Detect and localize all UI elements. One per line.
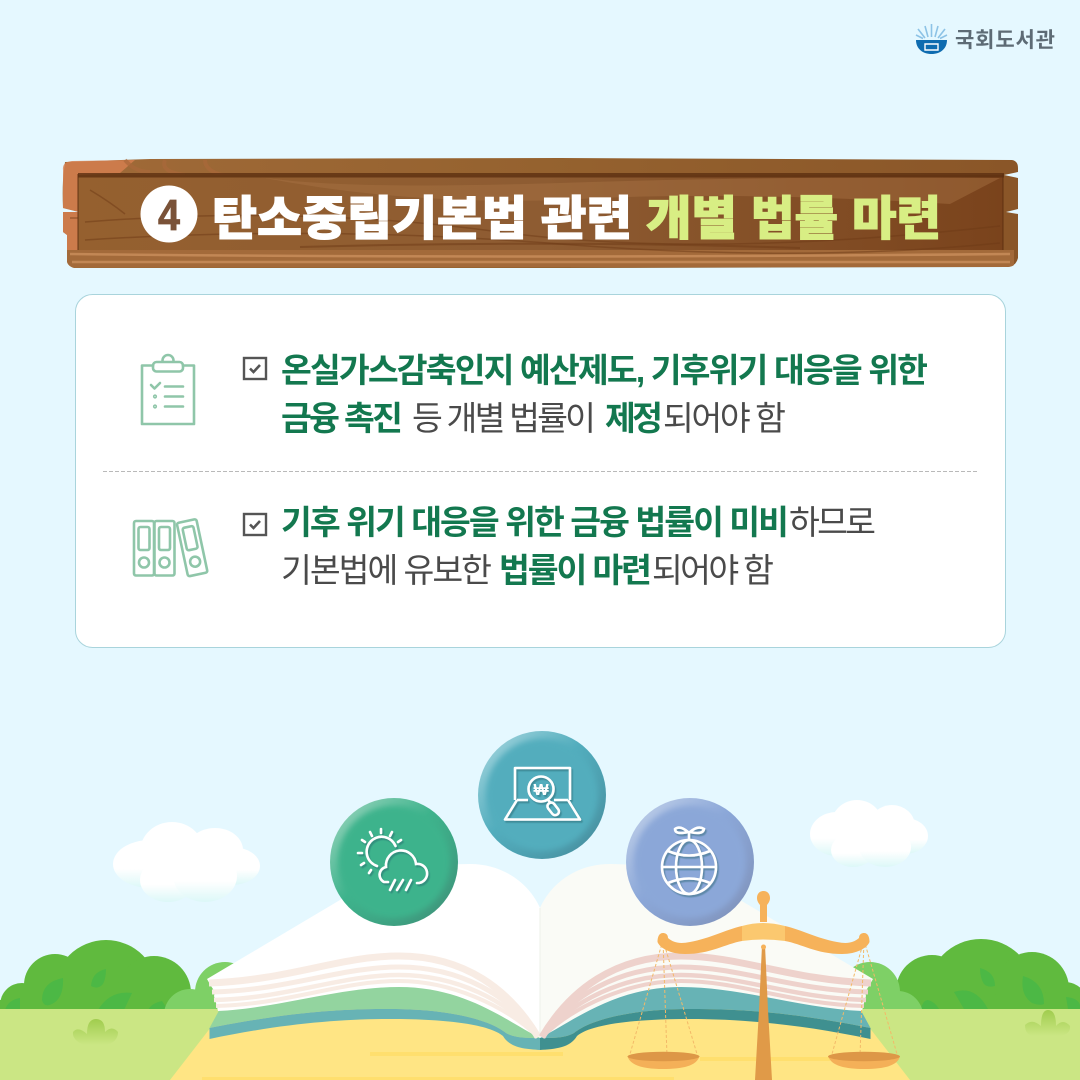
icon: binders	[134, 519, 208, 576]
title text: 탄소중립기본법	[212, 192, 527, 245]
grass tuft left	[73, 1019, 118, 1045]
icon: clipboard checklist	[142, 355, 194, 424]
logo wordmark: 국회도서관	[955, 29, 1055, 52]
item 1 text	[244, 353, 928, 438]
number badge 4	[140, 186, 198, 242]
right page	[540, 864, 873, 1050]
icon circle: laptop search: ₩	[533, 782, 549, 799]
number badge 4: 4	[158, 191, 180, 240]
cloud left	[113, 822, 260, 902]
title text: 관련	[541, 192, 632, 245]
scale pole	[755, 945, 772, 1080]
icon circle: laptop search	[478, 731, 606, 859]
scale beam	[658, 923, 870, 954]
title text: 마련	[852, 192, 941, 245]
item 2 text: 되어야 함	[652, 553, 774, 590]
scale strings	[630, 940, 897, 1056]
bushes left	[0, 940, 255, 1044]
ground	[0, 1009, 1080, 1080]
icon circle: globe sprout	[626, 798, 754, 926]
title text: 법률	[751, 192, 838, 245]
item 1 text: 온실가스감축인지 예산제도, 기후위기 대응을 위한	[281, 353, 928, 390]
checkbox	[244, 514, 266, 535]
item 1 text: 금융 촉진	[281, 401, 403, 438]
title text	[212, 192, 941, 245]
left page	[207, 864, 540, 1050]
open book	[207, 864, 873, 1050]
item 1 text: 제정	[605, 401, 663, 438]
wood plank	[63, 158, 1018, 268]
scale finial	[757, 891, 770, 922]
checkbox	[244, 358, 266, 379]
yellow path	[170, 1009, 910, 1080]
item 2 text	[244, 505, 876, 590]
item 1 text: 되어야 함	[663, 401, 786, 438]
cloud right	[810, 800, 928, 867]
logo: National Assembly Library	[916, 24, 1055, 54]
left pan	[628, 1052, 700, 1069]
panel: content card	[76, 294, 1006, 648]
item 2 text: 기본법에 유보한	[281, 553, 492, 590]
item 2 text: 법률이 마련	[499, 553, 652, 590]
wooden title sign	[63, 158, 1018, 268]
item 1 text: 등 개별 법률이	[412, 401, 596, 438]
item 2 text: 하므로	[789, 505, 876, 542]
icon circle: weather	[330, 798, 458, 926]
grass tuft right	[1025, 1010, 1070, 1036]
balance scale	[628, 891, 900, 1080]
icon: open book with rays	[916, 24, 947, 54]
right pan	[828, 1052, 900, 1069]
bushes right	[840, 939, 1080, 1047]
title text: 개별	[646, 192, 737, 245]
item 2 text: 기후 위기 대응을 위한 금융 법률이 미비	[281, 505, 789, 542]
